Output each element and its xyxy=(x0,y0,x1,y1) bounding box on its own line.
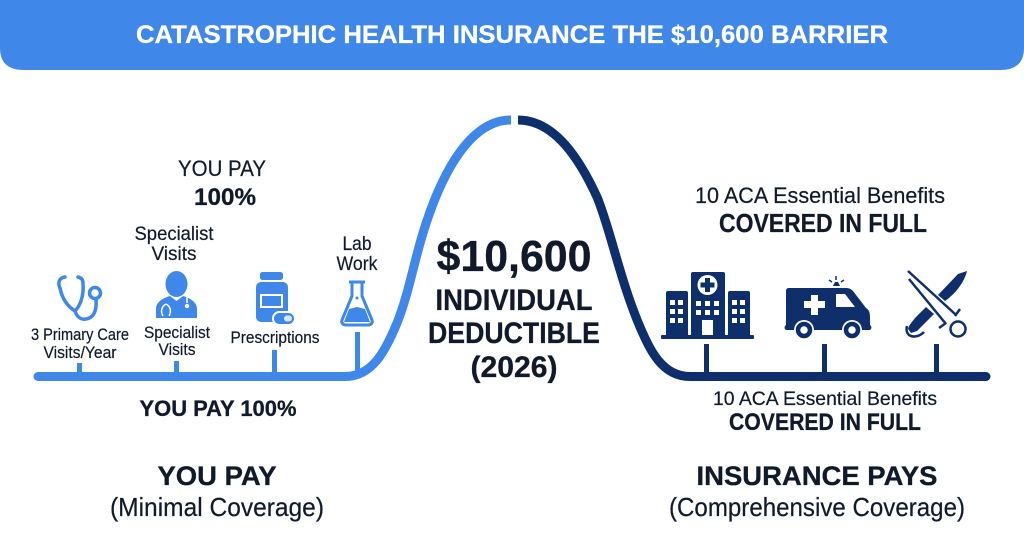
upper label: covered in full xyxy=(695,183,945,238)
center deductible: $10,600 xyxy=(436,232,592,281)
label: lab work xyxy=(336,233,378,275)
label: lab work: Lab xyxy=(342,233,372,255)
right footer: INSURANCE PAYS xyxy=(696,461,938,491)
header banner xyxy=(0,0,1024,70)
label: specialist visits xyxy=(144,324,210,359)
left curve: you pay xyxy=(38,120,511,376)
icon: doctor xyxy=(156,271,197,318)
center deductible: DEDUCTIBLE xyxy=(428,317,600,350)
label: prescriptions: Prescriptions xyxy=(230,329,320,347)
label: primary care: Visits/Year xyxy=(44,344,117,362)
you pay 100% upper label: 100% xyxy=(194,184,256,211)
upper label: specialist visits: Visits xyxy=(152,243,197,265)
center deductible: INDIVIDUAL xyxy=(436,284,592,317)
label: primary care: 3 Primary Care xyxy=(31,326,129,344)
you pay 100% lower label: YOU PAY 100% xyxy=(140,396,296,421)
right curve end cap xyxy=(982,372,990,381)
left curve end cap xyxy=(34,372,42,381)
center deductible xyxy=(428,232,600,384)
upper label: specialist visits: Specialist xyxy=(134,223,214,245)
icon: surgical tools xyxy=(907,271,967,337)
center deductible: (2026) xyxy=(470,351,558,384)
lower label: covered in full: 10 ACA Essential Benefits xyxy=(713,388,937,410)
label: lab work: Work xyxy=(336,253,378,275)
left footer: (Minimal Coverage) xyxy=(110,492,324,522)
icon: hospital xyxy=(661,272,754,339)
icon: flask xyxy=(342,282,372,325)
right footer xyxy=(669,461,965,522)
right curve: insurance pays xyxy=(518,120,986,376)
lower label: covered in full xyxy=(713,388,937,436)
you pay 100% upper label: YOU PAY xyxy=(178,156,266,181)
left ticks xyxy=(77,332,360,375)
left footer xyxy=(110,461,324,522)
left footer: YOU PAY xyxy=(158,461,276,491)
right footer: (Comprehensive Coverage) xyxy=(669,492,965,522)
upper label: covered in full: COVERED IN FULL xyxy=(719,208,927,238)
icon: stethoscope xyxy=(59,277,100,319)
upper label: specialist visits xyxy=(134,223,214,265)
upper label: covered in full: 10 ACA Essential Benefits xyxy=(695,183,945,208)
icon: ambulance xyxy=(785,276,871,340)
lower label: covered in full: COVERED IN FULL xyxy=(729,409,921,436)
label: specialist visits: Specialist xyxy=(144,324,210,342)
label: specialist visits: Visits xyxy=(158,341,196,359)
right ticks xyxy=(704,344,939,374)
title: CATASTROPHIC HEALTH INSURANCE THE $10,600 BARRIER xyxy=(136,21,888,49)
label: primary care xyxy=(31,326,129,362)
icon: prescription bottle xyxy=(256,272,295,325)
you pay 100% upper label xyxy=(178,156,266,211)
